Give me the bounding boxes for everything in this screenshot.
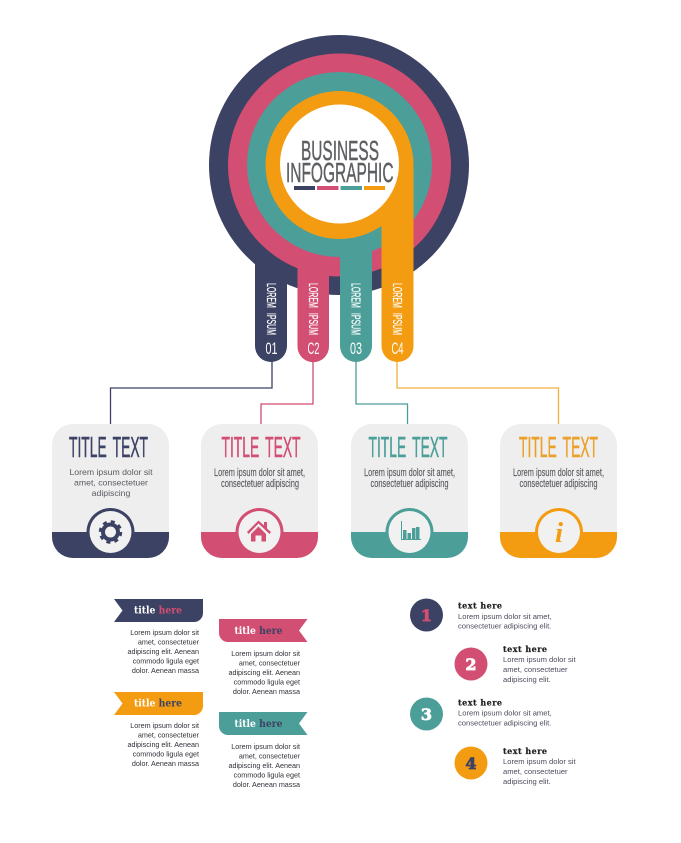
- ribbon text: orange: [127, 721, 200, 768]
- ribbon: pink: title here: [234, 626, 282, 637]
- numbered item 1: 1: [421, 606, 432, 625]
- ribbon: orange: [114, 692, 203, 715]
- concentric rings with tabs: [209, 35, 469, 362]
- numbered item 2: text here: [503, 644, 547, 654]
- numbered item 4: adipiscing elit.: [503, 777, 551, 786]
- numbered item 4: Lorem ipsum dolor sit: [503, 757, 576, 766]
- ribbon: navy: title here: [134, 606, 182, 616]
- numbered item 4: amet, consectetuer: [503, 767, 568, 776]
- numbered item 3: consectetuer adipiscing elit.: [458, 718, 551, 728]
- card 1: amet, consectetuer: [74, 478, 148, 488]
- ribbon: pink: [219, 619, 308, 642]
- numbered item 4: 4: [465, 754, 477, 773]
- numbered item 2: Lorem ipsum dolor sit: [503, 655, 576, 664]
- card 4: [500, 424, 617, 558]
- numbered item 2: adipiscing elit.: [503, 675, 551, 684]
- tab labels: [264, 283, 405, 358]
- icon: bar chart: [401, 521, 421, 540]
- card 3: TITLE TEXT: [368, 432, 448, 464]
- numbered item 1: consectetuer adipiscing elit.: [458, 622, 551, 630]
- icon: gear: [100, 522, 120, 542]
- ribbon text: teal: Lorem ipsum dolor sit: [231, 742, 300, 751]
- tab labels: 01: [266, 339, 278, 358]
- card 3: Lorem ipsum dolor sit amet,: [364, 467, 455, 479]
- numbered item 4: [454, 746, 576, 786]
- numbered item 3: [410, 698, 552, 730]
- ribbon text: orange: commodo ligula eget: [133, 749, 199, 758]
- tab labels: LOREM IPSUM: [264, 283, 279, 335]
- tab labels: LOREM IPSUM: [348, 283, 364, 335]
- numbered item 1: Lorem ipsum dolor sit amet,: [458, 612, 552, 621]
- tab labels: LOREM IPSUM: [390, 283, 405, 335]
- title: business infographic: [286, 135, 394, 188]
- ribbon text: navy: amet, consectetuer: [138, 638, 200, 646]
- numbered item 2: 2: [465, 655, 477, 674]
- numbered item 1: text here: [458, 600, 502, 610]
- ribbon text: pink: adipiscing elit. Aenean: [228, 668, 300, 677]
- numbered item 3: 3: [421, 705, 432, 724]
- icon: info: i: [555, 517, 563, 549]
- tab labels: 03: [350, 339, 362, 358]
- ribbon: teal: [219, 712, 308, 735]
- ribbon: navy: [114, 599, 203, 622]
- ribbon text: teal: dolor. Aenean massa: [233, 780, 300, 789]
- card 2: Lorem ipsum dolor sit amet,: [214, 467, 305, 479]
- tab labels: C4: [392, 339, 404, 358]
- ribbon text: orange: dolor. Aenean massa: [132, 759, 199, 768]
- ribbon: orange: title here: [134, 698, 182, 710]
- ribbon text: pink: amet, consectetuer: [239, 658, 301, 668]
- card 2: TITLE TEXT: [222, 432, 301, 464]
- numbered item 2: [454, 644, 576, 684]
- ribbon text: pink: commodo ligula eget: [234, 677, 300, 686]
- card 1: [52, 424, 169, 558]
- title colour bars: [294, 186, 385, 190]
- card 2: consectetuer adipiscing: [221, 478, 299, 490]
- ribbon text: navy: commodo ligula eget: [133, 656, 199, 665]
- ribbon text: teal: commodo ligula eget: [234, 770, 300, 779]
- ribbon text: pink: Lorem ipsum dolor sit: [231, 649, 300, 658]
- numbered item 3: text here: [458, 698, 502, 708]
- card 3: consectetuer adipiscing: [370, 478, 448, 490]
- card 2: [201, 424, 318, 558]
- ribbon text: teal: amet, consectetuer: [239, 752, 301, 760]
- numbered item 2: amet, consectetuer: [503, 665, 568, 674]
- card 4: consectetuer adipiscing: [520, 478, 598, 490]
- numbered item 4: text here: [503, 746, 547, 756]
- card 4: Lorem ipsum dolor sit amet,: [513, 467, 604, 479]
- card 1: TITLE TEXT: [69, 432, 148, 464]
- ribbon text: navy: adipiscing elit. Aenean: [127, 647, 199, 656]
- title: business infographic: INFOGRAPHIC: [286, 157, 394, 188]
- ribbon text: navy: dolor. Aenean massa: [132, 666, 199, 675]
- card 3: [351, 424, 468, 558]
- icon: house: [247, 520, 271, 542]
- ribbon text: orange: Lorem ipsum dolor sit: [130, 721, 199, 730]
- ribbon text: navy: [127, 628, 200, 675]
- ribbon text: orange: adipiscing elit. Aenean: [127, 740, 199, 749]
- ribbon text: orange: amet, consectetuer: [138, 730, 200, 740]
- ribbon text: teal: adipiscing elit. Aenean: [228, 761, 300, 770]
- ribbon: teal: title here: [234, 719, 282, 730]
- connector lines: [110, 360, 558, 424]
- ribbon text: pink: dolor. Aenean massa: [233, 687, 300, 696]
- numbered item 3: Lorem ipsum dolor sit amet,: [458, 708, 552, 718]
- numbered item 1: [410, 598, 552, 632]
- title: business infographic: BUSINESS: [301, 135, 379, 166]
- ribbon text: navy: Lorem ipsum dolor sit: [130, 628, 199, 637]
- ribbon text: pink: [228, 649, 301, 696]
- tab labels: LOREM IPSUM: [306, 283, 321, 335]
- ribbon text: teal: [228, 742, 301, 789]
- card 1: Lorem ipsum dolor sit: [69, 467, 153, 477]
- card 4: TITLE TEXT: [519, 432, 598, 464]
- tab labels: C2: [308, 339, 320, 358]
- card 1: adipiscing: [92, 488, 130, 498]
